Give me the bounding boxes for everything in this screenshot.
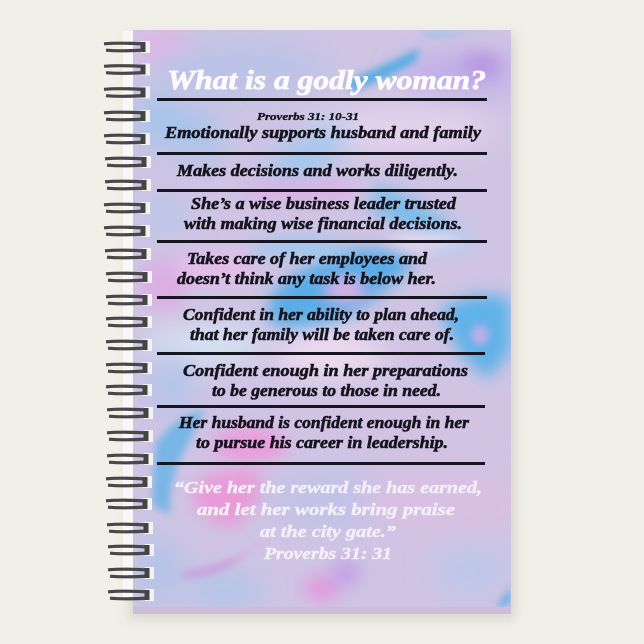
- item: emotional support: Emotionally supports husband and family: [164, 123, 482, 142]
- item: husband career: Her husband is confident enough in her: [178, 413, 470, 432]
- closing quote: and let her works bring praise: [197, 500, 455, 519]
- item: husband career: to pursue his career in leadership.: [196, 433, 448, 452]
- item: business leader: with making wise financial decisions.: [184, 214, 462, 233]
- item: husband career: [178, 413, 470, 452]
- item: decisions: Makes decisions and works diligently.: [176, 161, 458, 180]
- item: employees: Takes care of her employees and: [187, 249, 428, 268]
- spiral binding: [104, 41, 154, 601]
- closing quote: “Give her the reward she has earned,: [174, 478, 482, 497]
- item: business leader: She’s a wise business leader trusted: [191, 194, 457, 213]
- item: business leader: [184, 194, 462, 233]
- closing quote: [174, 478, 482, 563]
- divider lines: [157, 98, 487, 465]
- notebook shadow: [128, 34, 516, 620]
- closing quote: Proverbs 31: 31: [263, 544, 392, 563]
- item: generous: to be generous to those in need.: [212, 381, 441, 400]
- item: employees: doesn’t think any task is below her.: [177, 269, 436, 288]
- back page edge: [123, 31, 135, 597]
- notebook cover: [133, 30, 520, 614]
- item: plan ahead: [183, 305, 459, 344]
- closing quote: at the city gate.”: [260, 522, 396, 541]
- marble pattern: [133, 30, 520, 614]
- item: generous: Confident enough in her preparations: [183, 361, 468, 380]
- title: What is a godly woman?: [167, 65, 486, 95]
- item: employees: [177, 249, 436, 288]
- scripture reference: Proverbs 31: 10-31: [257, 111, 359, 123]
- item: generous: [183, 361, 468, 400]
- item: plan ahead: that her family will be taken care of.: [190, 325, 454, 344]
- item: plan ahead: Confident in her ability to plan ahead,: [183, 305, 459, 324]
